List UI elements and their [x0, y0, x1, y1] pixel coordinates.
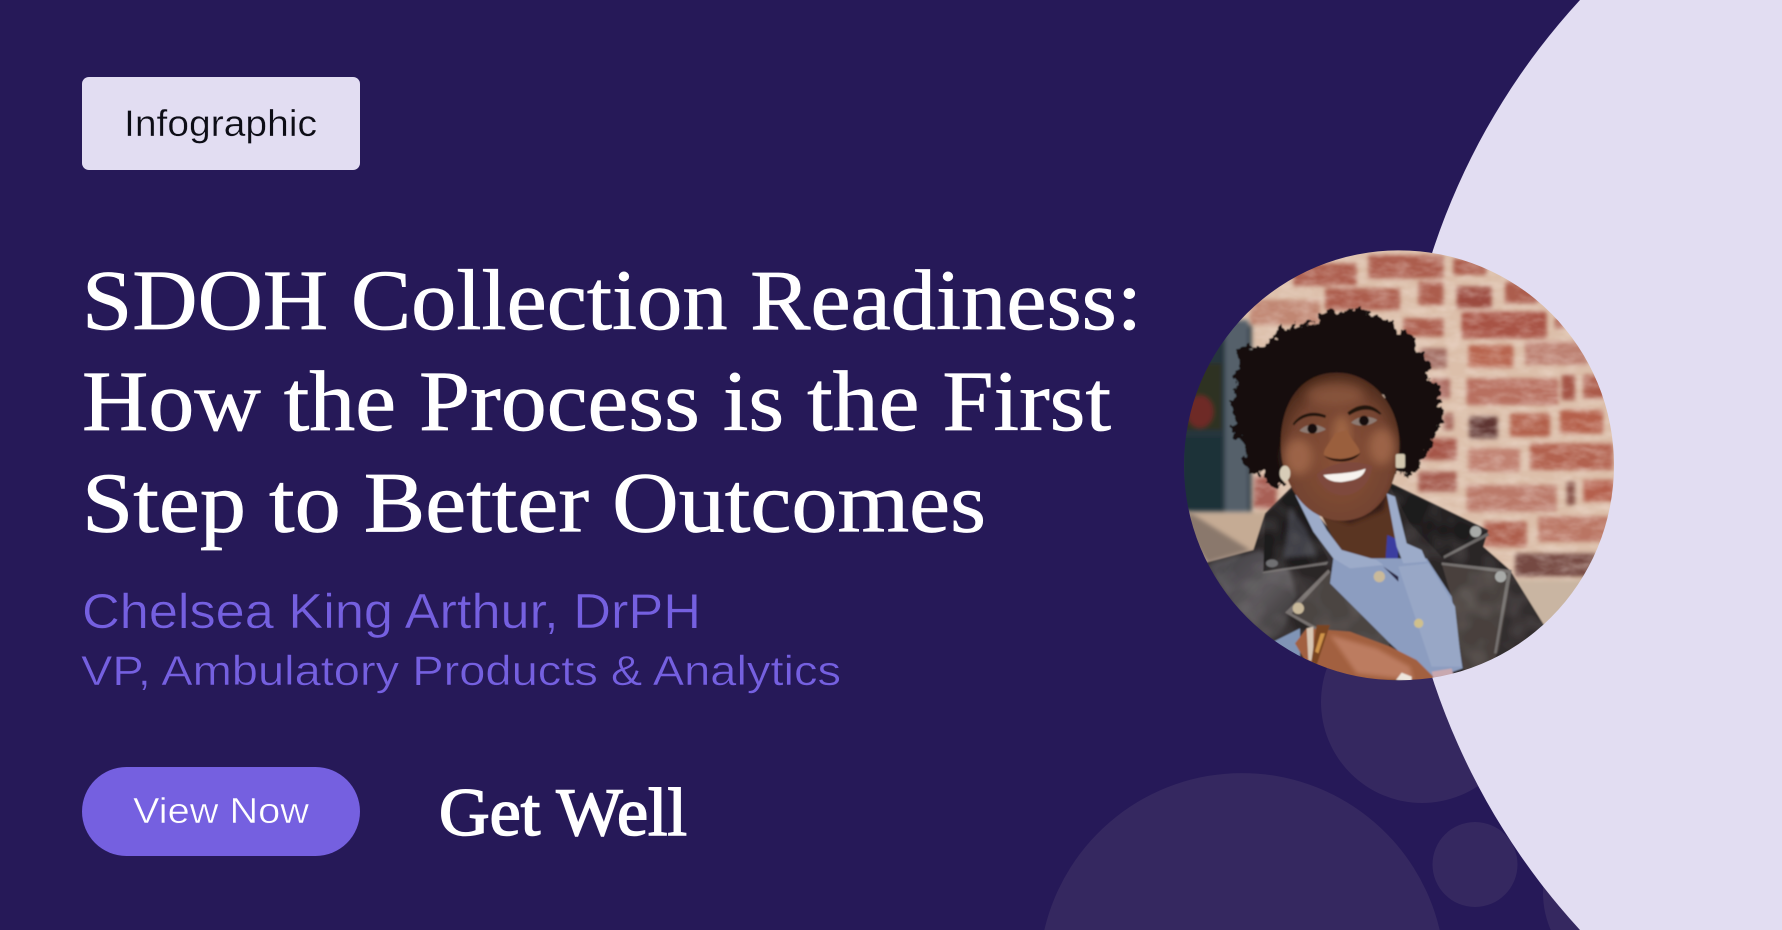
cushion: [1187, 512, 1250, 563]
title: [82, 252, 1142, 550]
title: Step to Better Outcomes: [82, 454, 986, 550]
jacket: [1203, 482, 1547, 683]
author name and role: VP, Ambulatory Products & Analytics: [81, 647, 841, 694]
necklace: [1384, 534, 1399, 560]
fingernails: [1432, 668, 1453, 678]
earrings: [1280, 466, 1290, 481]
left collar: [1263, 488, 1328, 572]
button: View Now: View Now: [133, 790, 310, 831]
button: View Now: [82, 767, 360, 856]
denim shirt: [1295, 493, 1463, 680]
right lapel: [1442, 563, 1512, 670]
window and frame: [1180, 320, 1252, 512]
brick wall: [1188, 250, 1614, 582]
jacket and shirt buttons: [1266, 526, 1506, 628]
leather sheen: [1208, 490, 1543, 666]
large lavender circle: [1399, 0, 1782, 930]
stone ledge: [1190, 510, 1580, 624]
left sleeve: [1207, 550, 1297, 643]
face: [1280, 373, 1405, 521]
decorative circles: [1044, 601, 1729, 930]
portrait photo illustration: [1180, 247, 1620, 683]
left lapel: [1292, 572, 1390, 646]
author name and role: Chelsea King Arthur, DrPH: [82, 585, 701, 639]
right collar: [1388, 483, 1488, 558]
tag: Infographic: [82, 77, 360, 170]
eyebrows: [1293, 413, 1326, 425]
eyes: [1299, 425, 1326, 433]
title: SDOH Collection Readiness:: [82, 252, 1142, 348]
teeth: [1323, 469, 1366, 482]
bracelets: [1307, 627, 1313, 662]
nose: [1324, 436, 1360, 460]
author name and role: [81, 585, 841, 694]
tag: Infographic: Infographic: [124, 103, 317, 144]
neck and chest: [1322, 494, 1395, 558]
ring: [1396, 673, 1412, 682]
logo: Get Well: Get Well: [439, 774, 687, 850]
title: How the Process is the First: [82, 353, 1111, 449]
sleeve cuff, forearm and hand: [1273, 625, 1453, 682]
hair: [1232, 307, 1443, 487]
lips: [1318, 464, 1372, 494]
